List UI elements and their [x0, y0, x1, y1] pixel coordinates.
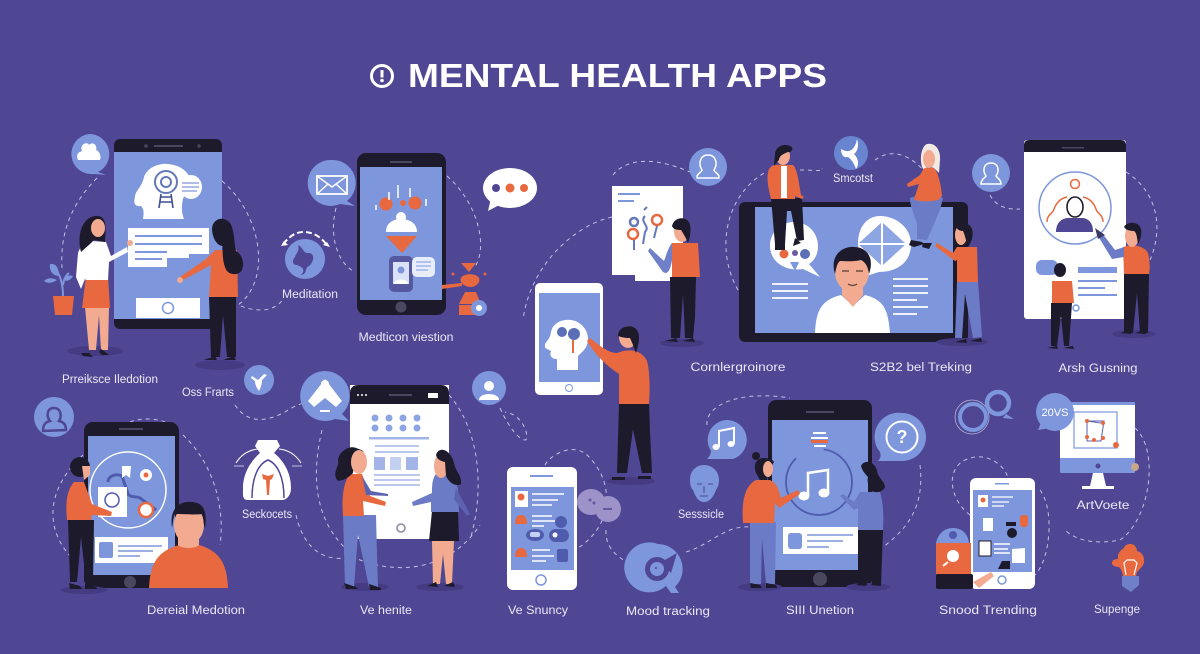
label: S2B2 bel Treking [870, 362, 972, 374]
phone [768, 400, 872, 587]
panel: poster with man [612, 148, 786, 374]
figure: woman in orange [738, 452, 800, 591]
label: oss frarts with icon [182, 365, 274, 399]
panel: mood tracking icon: Mood tracking [626, 606, 710, 618]
figure: seated man [768, 145, 804, 250]
icon: ring bubbles [955, 392, 1014, 434]
label: Medticon viestion [358, 332, 454, 344]
phone [357, 153, 446, 315]
icon: propeller [834, 136, 868, 170]
poster [612, 186, 683, 281]
figure: woman in orange [335, 447, 389, 591]
card [783, 527, 858, 554]
figure: standing man right of tablet [935, 223, 988, 346]
profile circle [1039, 172, 1111, 244]
panel: handshake phone [300, 371, 506, 617]
label: SIII Unetion [786, 605, 854, 617]
panel: face icon: Sesssicle [678, 509, 724, 521]
phone [84, 422, 179, 588]
icon: community bubble [71, 134, 109, 175]
panel: bag icon: Seckocets [242, 509, 292, 521]
icon: avatar bubble [34, 397, 74, 437]
icon: right speech bubble with cross [858, 216, 911, 277]
label: Ve Snuncy [508, 605, 568, 617]
label: Cornlergroinore [690, 362, 786, 374]
panel: list phone [507, 467, 621, 617]
panel: mood tracking icon [624, 542, 710, 618]
label: Prreiksce Iledotion [62, 374, 158, 386]
panel: top-left phone with two women [44, 134, 245, 386]
icon: question bubble [875, 413, 926, 461]
panel: monitor [1036, 393, 1139, 512]
phone [507, 467, 577, 590]
mini device and chat [389, 256, 435, 292]
icon: orange cylinder [936, 528, 994, 589]
panel: tablet with meditating man [739, 136, 1010, 374]
panel: light bulb: Supenge [1094, 604, 1140, 616]
icon: orange stack [442, 263, 487, 316]
icon: envelope bubble [308, 160, 356, 206]
figure: woman with white top [67, 216, 133, 357]
panel: small phone with cylinder [936, 392, 1037, 617]
icon: plant in pot [44, 264, 74, 315]
icon: woman avatar [689, 148, 727, 186]
panel: meditation icon: Meditation [282, 289, 338, 301]
icon: lavender bubbles [577, 489, 621, 522]
label: Snood Trending [939, 605, 1037, 617]
icon: people bubble [300, 371, 350, 421]
figure: woman in orange [177, 219, 245, 370]
icon: 20VS bubble: 20VS [1042, 407, 1068, 419]
card [95, 537, 168, 563]
icon: profile [472, 371, 506, 405]
connector: dashed paths [53, 154, 1157, 575]
icon: music in circle [786, 432, 852, 515]
phone [1024, 140, 1126, 319]
phone [114, 139, 222, 329]
panel: bottom-left phone [34, 397, 245, 617]
label: Ve henite [360, 605, 412, 617]
figure: woman in blue [412, 450, 470, 591]
label: oss frarts with icon: Oss Frarts [182, 387, 234, 399]
icon: speech bubble with dots [483, 168, 537, 211]
label: top: Smcotst [833, 173, 874, 185]
icon: head with badge [134, 164, 202, 219]
icon: question bubble: ? [896, 427, 908, 447]
icon: music note bubble [707, 420, 747, 459]
icon: left speech bubble [770, 222, 820, 277]
label: ArtVoete [1076, 500, 1130, 512]
screen content [978, 495, 1028, 569]
text card [128, 228, 209, 267]
figure: man with tablet [648, 218, 704, 347]
panel: music phone [707, 400, 926, 617]
panel: second phone [308, 153, 537, 344]
panel: face icon [678, 465, 724, 521]
text lines [772, 279, 928, 314]
icon: user avatar [972, 154, 1010, 192]
tablet [739, 202, 968, 342]
monitor [1060, 402, 1139, 489]
figure: standing person [61, 457, 112, 594]
card lines [1073, 267, 1117, 311]
label: Dereial Medotion [147, 605, 245, 617]
title: MENTAL HEALTH APPS [408, 57, 827, 94]
button [136, 298, 200, 318]
panel: light bulb [1094, 544, 1144, 616]
panel: meditation icon [281, 232, 338, 301]
figure: seated woman [907, 144, 943, 249]
list rows [515, 491, 569, 562]
figure: man bust [149, 502, 228, 588]
phone [535, 283, 603, 395]
panel: bag icon [234, 440, 302, 521]
app circle [90, 452, 166, 528]
screen content [369, 414, 429, 532]
figure: woman in blue [840, 462, 890, 591]
panel: brain phone with man [535, 283, 655, 485]
figure: meditating man [815, 247, 890, 333]
icon: head with puzzle [545, 320, 588, 370]
phone [350, 385, 449, 539]
figure: small man [1036, 260, 1074, 349]
panel: top-right phone [1024, 140, 1156, 375]
figure: man in orange [587, 326, 655, 485]
meditation graphic [376, 185, 426, 253]
label: Arsh Gusning [1058, 363, 1138, 375]
figure: man pointing [1095, 223, 1156, 338]
phone [970, 478, 1035, 589]
